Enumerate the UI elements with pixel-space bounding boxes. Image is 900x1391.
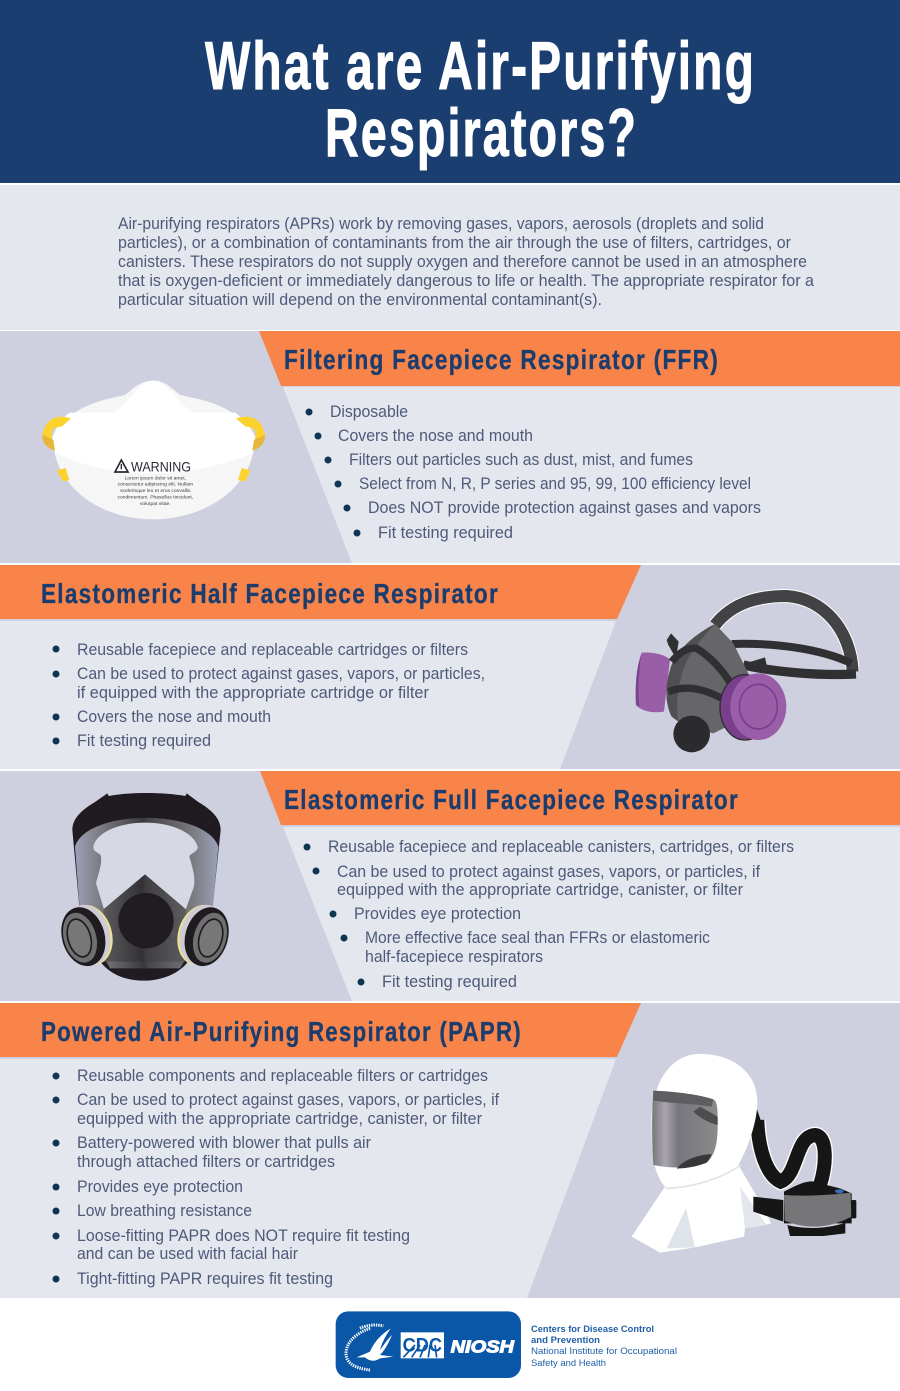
- bullet list: PAPR: [52, 1067, 499, 1288]
- bullet list: FFR: [306, 403, 761, 542]
- bullet list: half facepiece: Fit testing required: [77, 732, 211, 750]
- heading: FFR: Filtering Facepiece Respirator (FFR): [284, 344, 719, 375]
- icon: disposable N95 mask: WARNING: [131, 458, 191, 474]
- bullet list: FFR: Covers the nose and mouth: [338, 427, 533, 445]
- bullet list: PAPR: Low breathing resistance: [77, 1202, 252, 1220]
- logo badge: HHS, CDC, NIOSH: [336, 1311, 521, 1378]
- intro text block: particles), or a combination of contaminants from the air through the use of filters, cartridges, or: [118, 234, 791, 252]
- organisation name: and Prevention: [531, 1335, 600, 1346]
- icon: disposable N95 mask: scelerisque leo et eros convallis: [120, 488, 191, 494]
- intro text block: particular situation will depend on the environmental contaminant(s).: [118, 291, 602, 309]
- bullet list: full facepiece: Fit testing required: [382, 973, 517, 991]
- bullet list: PAPR: through attached filters or cartridges: [77, 1153, 335, 1171]
- logo badge: HHS, CDC, NIOSH: CDC: [403, 1336, 442, 1357]
- heading: full facepiece: Elastomeric Full Facepiece Respirator: [284, 784, 739, 815]
- icon: disposable N95 mask: [42, 381, 265, 519]
- bullet list: full facepiece: Reusable facepiece and replaceable canisters, cartridges, or filters: [328, 838, 794, 856]
- icon: disposable N95 mask: condimentum. Phasellus tincidunt,: [118, 495, 193, 501]
- bullet list: FFR: Disposable: [330, 403, 408, 421]
- icon: half facepiece respirator: [636, 596, 856, 752]
- panel: filtering facepiece respirator: [0, 331, 900, 563]
- organisation name: National Institute for Occupational: [531, 1346, 677, 1357]
- icon: disposable N95 mask: Lorem ipsum dolor sit amet,: [125, 475, 186, 481]
- bullet list: PAPR: equipped with the appropriate cartridge, canister, or filter: [77, 1110, 482, 1128]
- title banner: Respirators?: [325, 95, 638, 171]
- bullet list: full facepiece: [304, 838, 794, 991]
- bullet list: PAPR: Can be used to protect against gases, vapors, or particles, if: [77, 1091, 499, 1109]
- icon: disposable N95 mask: consectetur adipiscing elit. Nullam: [118, 482, 193, 488]
- heading: PAPR: Powered Air-Purifying Respirator (PAPR): [41, 1016, 522, 1047]
- bullet list: PAPR: Reusable components and replaceable filters or cartridges: [77, 1067, 488, 1085]
- bullet list: half facepiece: if equipped with the appropriate cartridge or filter: [77, 684, 429, 702]
- bullet list: FFR: Fit testing required: [378, 524, 513, 542]
- bullet list: full facepiece: Can be used to protect against gases, vapors, or particles, if: [337, 863, 760, 881]
- organisation name: [531, 1324, 677, 1369]
- bullet list: PAPR: Battery-powered with blower that pulls air: [77, 1134, 371, 1152]
- icon: PAPR hood and blower: [632, 1054, 856, 1253]
- bullet list: PAPR: and can be used with facial hair: [77, 1245, 298, 1263]
- bullet list: half facepiece: Covers the nose and mouth: [77, 708, 271, 726]
- bullet list: half facepiece: Reusable facepiece and replaceable cartridges or filters: [77, 641, 468, 659]
- intro text block: Air-purifying respirators (APRs) work by removing gases, vapors, aerosols (droplets and solid: [118, 215, 764, 233]
- intro text block: canisters. These respirators do not supply oxygen and therefore cannot be used in an atmosphere: [118, 253, 807, 271]
- logo badge: HHS, CDC, NIOSH: NIOSH: [451, 1336, 515, 1356]
- panel: powered air-purifying respirator: [0, 1003, 900, 1298]
- intro text block: that is oxygen-deficient or immediately dangerous to life or health. The appropriate respirator for a: [118, 272, 815, 290]
- bullet list: full facepiece: More effective face seal than FFRs or elastomeric: [365, 929, 710, 947]
- bullet list: full facepiece: equipped with the appropriate cartridge, canister, or filter: [337, 881, 743, 899]
- bullet list: PAPR: Provides eye protection: [77, 1178, 243, 1196]
- footer logos: [336, 1311, 677, 1378]
- bullet list: full facepiece: half-facepiece respirators: [365, 948, 543, 966]
- bullet list: half facepiece: [52, 641, 485, 750]
- icon: disposable N95 mask: volutpat vitae.: [140, 501, 171, 507]
- title banner: [0, 0, 900, 183]
- bullet list: FFR: Select from N, R, P series and 95, 99, 100 efficiency level: [359, 475, 751, 493]
- bullet list: PAPR: Loose-fitting PAPR does NOT require fit testing: [77, 1227, 410, 1245]
- intro text block: [0, 185, 900, 330]
- bullet list: FFR: Does NOT provide protection against gases and vapors: [368, 499, 761, 517]
- panel: elastomeric full facepiece respirator: [0, 771, 900, 1001]
- bullet list: full facepiece: Provides eye protection: [354, 905, 521, 923]
- bullet list: half facepiece: Can be used to protect against gases, vapors, or particles,: [77, 665, 485, 683]
- icon: full facepiece respirator: [55, 793, 235, 981]
- heading: half facepiece: Elastomeric Half Facepiece Respirator: [41, 578, 499, 609]
- organisation name: Centers for Disease Control: [531, 1324, 654, 1335]
- bullet list: PAPR: Tight-fitting PAPR requires fit testing: [77, 1270, 333, 1288]
- organisation name: Safety and Health: [531, 1358, 606, 1369]
- bullet list: FFR: Filters out particles such as dust, mist, and fumes: [349, 451, 693, 469]
- panel: elastomeric half facepiece respirator: [0, 565, 900, 769]
